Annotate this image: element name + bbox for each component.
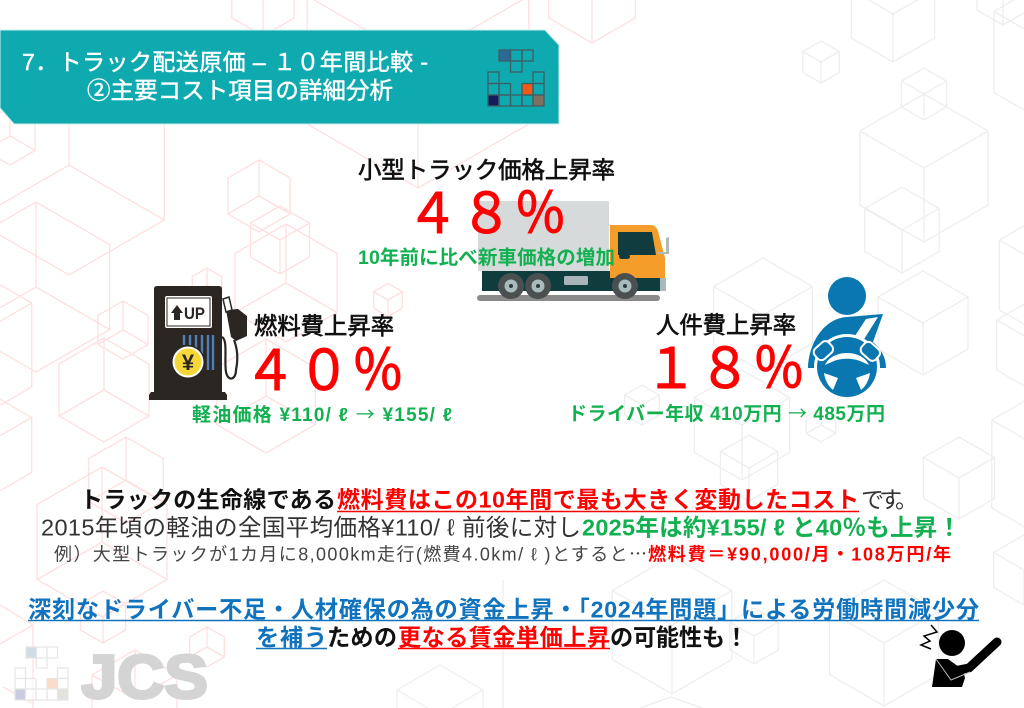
stat: fuel cost: 燃料費上昇率	[254, 307, 394, 341]
icon: fuel pump: ¥	[182, 350, 195, 375]
text block: fuel explanation: 例）大型トラックが1カ月に8,000km走行(燃費4.0km/ ℓ )とすると…	[54, 540, 647, 566]
stat: labor cost: 人件費上昇率	[656, 306, 796, 340]
stat: fuel cost: 軽油価格 ¥110/ ℓ → ¥155/ ℓ	[192, 400, 452, 427]
icon: fuel pump: UP	[184, 304, 205, 323]
stat: small truck price: 小型トラック価格上昇率	[358, 151, 615, 185]
header logo grid	[488, 50, 544, 106]
icon: fuel pump	[149, 286, 247, 400]
stat: fuel cost: ４０％	[244, 325, 406, 407]
text block: fuel explanation: です。	[861, 486, 918, 512]
callout: driver shortage: ための	[327, 624, 397, 650]
stat: fuel cost	[192, 307, 452, 427]
header title: 7．トラック配送原価 – １０年間比較 -	[22, 49, 428, 75]
header title: ②主要コスト項目の詳細分析	[87, 78, 393, 104]
icon: pointing person	[921, 625, 997, 687]
stat: small truck price: ４８％	[406, 168, 568, 250]
text block: fuel explanation: トラックの生命線である	[80, 486, 336, 512]
callout: driver shortage	[28, 596, 979, 650]
text block: fuel explanation: 燃料費はこの10年間で最も大きく変動したコスト	[337, 486, 859, 512]
text block: fuel explanation: 2025年は約¥155/ ℓ と40％も上昇！	[582, 514, 961, 540]
callout: driver shortage: 更なる賃金単価上昇	[398, 624, 610, 650]
header banner	[0, 30, 559, 124]
stat: labor cost	[568, 306, 885, 426]
header title	[22, 49, 428, 104]
text block: fuel explanation: 2015年頃の軽油の全国平均価格¥110/ ℓ 前後に対し	[41, 514, 581, 540]
callout: driver shortage: 深刻なドライバー不足・人材確保の為の資金上昇・「2024年問題」による労働時間減少分	[28, 596, 979, 622]
callout: driver shortage: の可能性も！	[610, 624, 748, 650]
stat: small truck price: 10年前に比べ新車価格の増加	[358, 246, 615, 269]
icon: driver with seatbelt	[808, 277, 886, 400]
icon: truck	[477, 201, 669, 301]
text block: fuel explanation	[41, 486, 961, 566]
logo watermark: JCS	[15, 647, 216, 704]
stat: labor cost: ドライバー年収 410万円 → 485万円	[568, 399, 885, 426]
text block: fuel explanation: 燃料費＝¥90,000/月・108万円/年	[648, 544, 951, 564]
stat: small truck price	[358, 151, 615, 269]
stat: labor cost: １８％	[645, 323, 807, 405]
callout: driver shortage: を補う	[256, 624, 327, 650]
